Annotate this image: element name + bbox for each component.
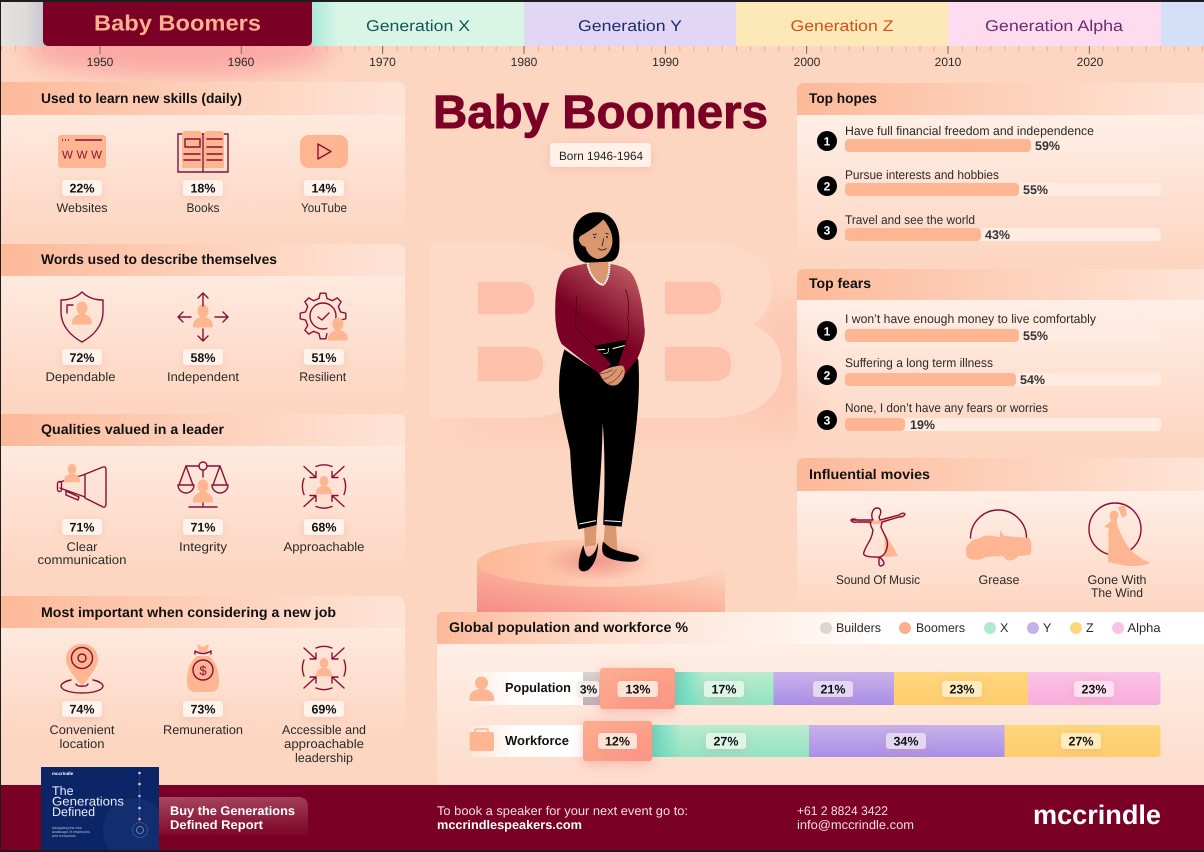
heading: movies: Influential movies xyxy=(809,466,930,482)
year axis: 1970 xyxy=(369,55,396,69)
panel: most important when considering a new job xyxy=(0,596,405,765)
tab: Generation X xyxy=(312,0,524,46)
call to action button: Buy the Generations xyxy=(170,804,295,818)
call to action button xyxy=(157,797,308,835)
year axis: 1960 xyxy=(228,55,255,69)
icon: megaphone xyxy=(58,464,106,507)
workforce row: 27% xyxy=(713,734,739,748)
workforce row: 27% xyxy=(1068,734,1094,748)
heading: top hopes: Top hopes xyxy=(809,90,877,106)
fear 1: 55% xyxy=(1023,329,1048,343)
label: gone with the wind: Gone With xyxy=(1088,573,1147,587)
legend: Builders xyxy=(836,621,881,635)
podium xyxy=(477,539,725,612)
stat: books xyxy=(183,180,223,215)
booking text: To book a speaker for your next event go to: xyxy=(437,804,688,818)
figure: woman xyxy=(555,212,645,571)
population row: 3% xyxy=(580,682,598,696)
footer xyxy=(0,767,1204,850)
stat: accessible: approachable xyxy=(284,737,364,751)
icon: shield xyxy=(61,292,103,342)
stat: accessible xyxy=(282,701,366,765)
stat: books: 18% xyxy=(190,182,216,196)
stat: remuneration: Remuneration xyxy=(163,723,243,737)
hope 2: Pursue interests and hobbies xyxy=(845,168,999,182)
stat: integrity: 71% xyxy=(190,520,216,534)
population row: 13% xyxy=(625,682,651,696)
fear 1: I won’t have enough money to live comfortably xyxy=(845,312,1097,326)
icon: approachable xyxy=(302,465,346,508)
fear 3 xyxy=(817,401,1161,432)
icon: grease car xyxy=(966,510,1031,560)
fear 1: 1 xyxy=(824,324,831,338)
report cover: Defined xyxy=(52,805,95,819)
fear 2: Suffering a long term illness xyxy=(845,356,993,370)
year axis: 2000 xyxy=(794,55,821,69)
stat: clear communication: Clear xyxy=(66,540,98,554)
stat: books: Books xyxy=(186,201,220,215)
hope 2 xyxy=(817,168,1161,197)
population row: 17% xyxy=(711,682,737,696)
tab: Generation Y: Generation Y xyxy=(578,18,682,35)
stat: convenient location: location xyxy=(60,737,105,751)
heading: new job xyxy=(0,596,405,628)
legend xyxy=(820,621,1161,635)
legend: Z xyxy=(1086,621,1094,635)
hope 1: Have full financial freedom and independence xyxy=(845,124,1094,138)
stat: accessible: 69% xyxy=(311,702,337,716)
fear 1 xyxy=(817,312,1161,343)
heading: qualities: Qualities valued in a leader xyxy=(41,421,225,437)
booking text: mccrindlespeakers.com xyxy=(437,818,582,832)
tab: Generation X: Generation X xyxy=(366,18,471,35)
fear 3: 3 xyxy=(824,414,831,428)
stat: clear communication: communication xyxy=(38,553,127,567)
icon: websites xyxy=(58,135,106,168)
stat: accessible: Accessible and xyxy=(282,723,366,737)
population row: 23% xyxy=(949,682,975,696)
population row: 23% xyxy=(1081,682,1107,696)
report cover: Navigating the new xyxy=(52,826,82,830)
call to action button: Defined Report xyxy=(170,818,264,832)
label: sound of music: Sound Of Music xyxy=(836,573,920,587)
workforce row: 34% xyxy=(893,734,919,748)
icon: sound of music dancer xyxy=(851,508,905,566)
year axis xyxy=(0,46,1204,69)
stat: remuneration: 73% xyxy=(190,702,216,716)
icon: youtube xyxy=(300,135,348,168)
stat: approachable: Approachable xyxy=(284,540,365,554)
panel: used to learn new skills xyxy=(0,82,405,235)
icon: scales xyxy=(178,462,228,507)
label: grease: Grease xyxy=(978,573,1020,587)
legend: Alpha xyxy=(1128,621,1161,635)
stat: websites: 22% xyxy=(69,182,95,196)
hope 2: 55% xyxy=(1023,183,1048,197)
report cover xyxy=(41,767,159,850)
tab: Baby Boomers active: Baby Boomers xyxy=(94,10,261,36)
stat: convenient location: Convenient xyxy=(50,723,115,737)
hope 1 xyxy=(817,124,1161,153)
icon: gone with the wind xyxy=(1089,503,1150,566)
stat: resilient xyxy=(299,349,347,384)
stat: independent: 58% xyxy=(190,351,216,365)
heading: top fears: Top fears xyxy=(809,275,871,291)
tab: Baby Boomers active xyxy=(43,0,312,46)
report cover: landscape of employees xyxy=(52,830,90,834)
heading: global population xyxy=(437,612,1204,644)
stat: integrity xyxy=(179,519,228,554)
icon: resilient gear xyxy=(300,293,349,342)
fear 3: 19% xyxy=(910,418,935,432)
workforce row: Workforce xyxy=(505,733,569,748)
stat: accessible: leadership xyxy=(295,751,353,765)
panel: influential movies xyxy=(797,458,1204,612)
heading: movies xyxy=(797,458,1204,491)
hope 1: 1 xyxy=(824,134,831,148)
icon: person xyxy=(470,676,494,701)
stat: dependable: 72% xyxy=(69,351,95,365)
heading: new job: Most important when considering a new job xyxy=(41,604,336,620)
icon: money bag xyxy=(187,644,219,692)
born date badge xyxy=(550,143,651,167)
hope 2: 2 xyxy=(824,180,831,194)
icon: websites: WWW xyxy=(62,150,102,162)
year axis: 2020 xyxy=(1077,55,1104,69)
panel: top fears xyxy=(797,269,1204,445)
icon: independent arrows xyxy=(178,293,228,341)
icon: accessible leadership xyxy=(302,646,346,690)
panel: qualities valued in a leader xyxy=(0,414,405,570)
tab: Generation Alpha: Generation Alpha xyxy=(985,18,1123,35)
stat: convenient location xyxy=(50,701,115,751)
contact details: +61 2 8824 3422 xyxy=(797,804,888,818)
hope 3: 43% xyxy=(985,228,1010,242)
big BB background lettering: BB xyxy=(419,196,796,464)
stat: approachable xyxy=(284,519,365,554)
contact details xyxy=(797,804,914,832)
tab: Generation Y xyxy=(524,0,736,46)
booking text xyxy=(437,804,688,832)
heading: used to learn xyxy=(0,82,405,115)
population row xyxy=(469,668,1160,709)
logo: mccrindle xyxy=(1033,800,1161,830)
legend: Boomers xyxy=(916,621,965,635)
stat: resilient: Resilient xyxy=(299,370,347,384)
label: gone with the wind xyxy=(1088,573,1147,600)
stat: approachable: 68% xyxy=(311,520,337,534)
stat: integrity: Integrity xyxy=(179,540,228,554)
fear 2: 54% xyxy=(1020,373,1045,387)
year axis: 1950 xyxy=(87,55,114,69)
year axis: 1980 xyxy=(511,55,538,69)
tab: Generation Z: Generation Z xyxy=(790,18,894,35)
stat: dependable xyxy=(46,349,116,384)
population row: Population xyxy=(505,680,571,695)
workforce row xyxy=(469,721,1160,761)
report cover: mccrindle xyxy=(52,771,74,776)
report cover: Generations xyxy=(52,794,124,808)
heading: qualities xyxy=(0,414,405,446)
year axis: 1990 xyxy=(652,55,679,69)
generation timeline tabs xyxy=(0,0,1204,46)
icon: location pin xyxy=(61,644,103,693)
fear 3: None, I don’t have any fears or worries xyxy=(845,401,1048,415)
heading: words xyxy=(0,244,405,276)
legend: Y xyxy=(1043,621,1052,635)
hope 3 xyxy=(817,213,1161,242)
hope 3: Travel and see the world xyxy=(845,213,975,227)
stat: clear communication xyxy=(38,519,127,567)
icon: books xyxy=(178,131,228,172)
heading: used to learn: Used to learn new skills (daily) xyxy=(41,90,242,106)
tab: Generation Z xyxy=(736,0,948,46)
legend: X xyxy=(1000,621,1009,635)
population row: 21% xyxy=(820,682,846,696)
heading: global population: Global population and workforce % xyxy=(449,619,689,635)
stat: dependable: Dependable xyxy=(46,370,116,384)
panel: words used to describe themselves xyxy=(0,244,405,400)
stat: websites: Websites xyxy=(56,201,108,215)
heading: words: Words used to describe themselves xyxy=(41,251,277,267)
panel: top hopes xyxy=(797,83,1204,260)
stat: remuneration xyxy=(163,701,243,737)
hope 1: 59% xyxy=(1035,139,1060,153)
hope 3: 3 xyxy=(824,224,831,238)
stat: resilient: 51% xyxy=(311,351,337,365)
stat: independent xyxy=(167,349,240,384)
fear 2 xyxy=(817,356,1161,387)
stat: clear communication: 71% xyxy=(69,520,95,534)
stat: youtube: YouTube xyxy=(301,201,347,215)
workforce row: 12% xyxy=(605,734,630,748)
icon: money bag: $ xyxy=(199,663,207,678)
stat: convenient location: 74% xyxy=(69,702,95,716)
heading: top hopes xyxy=(797,83,1204,115)
contact details: info@mccrindle.com xyxy=(797,818,914,832)
heading: top fears xyxy=(797,269,1204,300)
label: gone with the wind: The Wind xyxy=(1091,586,1143,600)
born date badge: Born 1946-1964 xyxy=(559,149,643,163)
stat: youtube: 14% xyxy=(311,182,337,196)
stat: youtube xyxy=(301,180,347,215)
panel: global population and workforce xyxy=(437,612,1204,785)
fear 2: 2 xyxy=(824,368,831,382)
stat: independent: Independent xyxy=(167,370,240,384)
report cover: and consumers xyxy=(52,834,76,838)
title: Baby Boomers xyxy=(433,85,768,138)
stat: websites xyxy=(56,180,108,215)
icon: briefcase xyxy=(470,729,494,751)
year axis: 2010 xyxy=(935,55,962,69)
report cover: The xyxy=(52,784,74,798)
tab: Generation Alpha xyxy=(948,0,1161,46)
